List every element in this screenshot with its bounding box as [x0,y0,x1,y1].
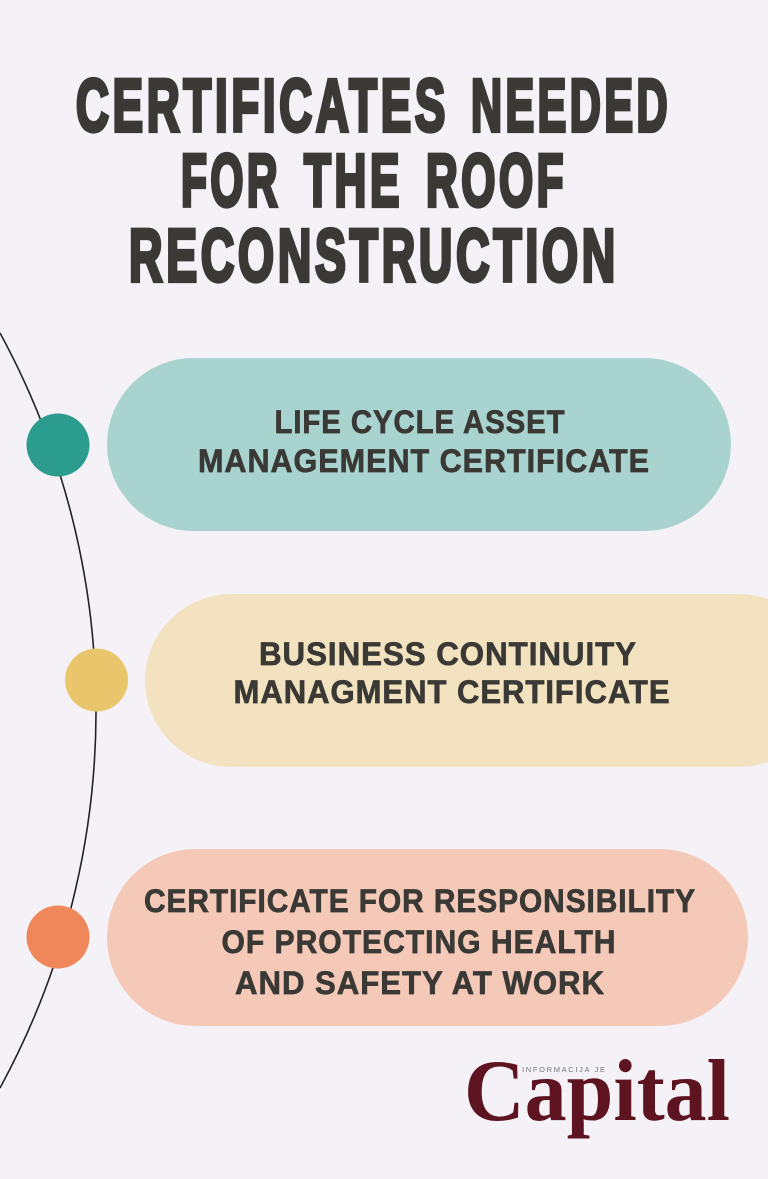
icon: yellow dot [65,648,128,712]
panel: health and safety certificate: CERTIFICATE FOR RESPONSIBILITY [144,883,696,919]
panel: health and safety certificate [107,849,748,1026]
title: CERTIFICATES [76,64,449,147]
panel: life cycle asset certificate [107,358,731,531]
panel: business continuity certificate: MANAGMENT CERTIFICATE [234,674,670,710]
panel: business continuity certificate [145,594,768,767]
panel: health and safety certificate: AND SAFETY AT WORK [235,965,605,1001]
icon: orange dot [26,906,90,968]
logo: Capital: INFORMACIJA JE [522,1065,605,1074]
panel: life cycle asset certificate: MANAGEMENT CERTIFICATE [198,443,650,479]
title: THE [304,139,403,222]
logo: Capital: Capital [464,1043,730,1140]
panel: health and safety certificate: OF PROTECTING HEALTH [222,924,616,960]
timeline curve [0,333,96,1088]
panel: life cycle asset certificate: LIFE CYCLE ASSET [274,404,566,440]
panel: business continuity certificate: BUSINESS CONTINUITY [259,636,637,672]
title: ROOF [426,139,567,222]
title: FOR [181,139,281,222]
icon: teal dot [26,414,90,476]
title [76,64,671,297]
